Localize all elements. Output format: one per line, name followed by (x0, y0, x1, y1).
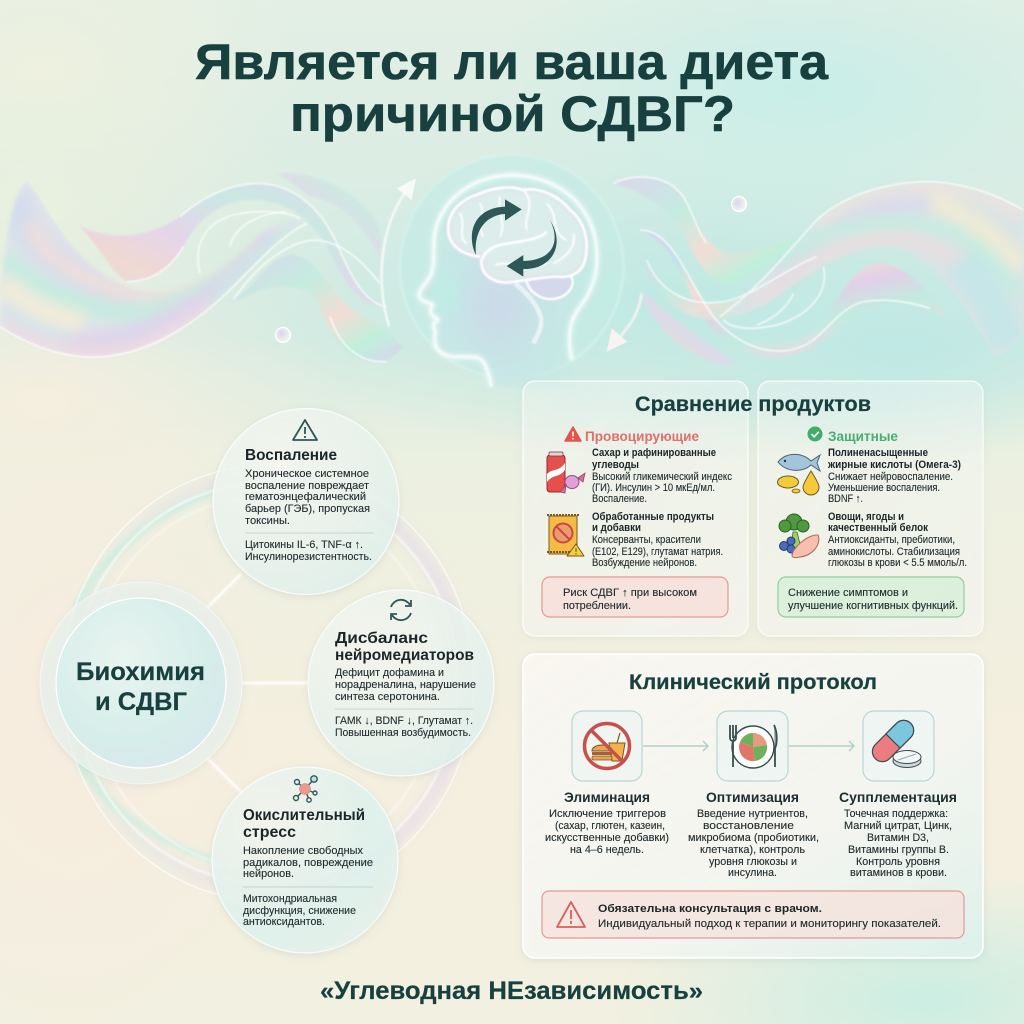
icon: molecule (294, 776, 317, 802)
arrow: left white (382, 178, 416, 327)
brain (448, 188, 587, 343)
description: радикалов, повреждение (243, 857, 373, 869)
step: оптимизация: микробиома (пробиотики, (688, 832, 819, 844)
callout text (598, 903, 941, 930)
step: элиминация: Элиминация (564, 789, 650, 805)
item: омега-3: Полиненасыщенные (828, 447, 928, 459)
item: овощи: аминокислоты. Стабилизация (828, 546, 960, 558)
heading: стресс (243, 824, 296, 841)
icon: warning (565, 427, 581, 441)
step: оптимизация: клетчатка), контроль (700, 844, 805, 856)
step: супплементация (839, 789, 957, 879)
step: оптимизация (688, 789, 819, 879)
markers: Инсулинорезистентность. (245, 551, 372, 563)
item: обработанные (592, 511, 723, 569)
node: дисбаланс нейромедиаторов (308, 590, 494, 776)
description: нейронов. (243, 868, 294, 880)
description: синтеза серотонина. (335, 691, 440, 703)
markers (245, 539, 372, 563)
step: супплементация: Супплементация (839, 789, 957, 805)
hub: Биохимия и СДВГ (40, 582, 242, 784)
head with brain (400, 155, 623, 387)
arrow: right white (607, 293, 642, 352)
callout: снижение (778, 577, 964, 617)
item: сахар: Воспаление. (592, 493, 647, 505)
node: воспаление (213, 408, 399, 594)
callout: снижение: Снижение симптомов и (788, 587, 908, 599)
item: сахар (592, 447, 732, 505)
icon: processed food bag (547, 515, 584, 556)
item: омега-3: Уменьшение воспаления. (828, 482, 940, 494)
callout: риск (542, 577, 728, 617)
icon box: optimisation (717, 711, 788, 781)
description: Накопление свободных (243, 845, 363, 857)
step: супплементация: Витамин D3, (867, 832, 929, 844)
item: омега-3 (827, 447, 961, 505)
icon: fish and omega (778, 454, 820, 495)
markers: Повышенная возбудимость. (335, 727, 471, 739)
title: причиной СДВГ? (290, 86, 735, 142)
item: омега-3: жирные кислоты (Омега-3) (827, 459, 961, 471)
callout text: Обязательна консультация с врачом. (598, 903, 822, 915)
iridescent waves right (613, 177, 1024, 365)
callout: риск: потреблении. (563, 600, 631, 612)
small bubble left (276, 328, 290, 342)
heading: Клинический протокол (629, 671, 877, 694)
item: обработанные: Возбуждение нейронов. (592, 557, 697, 569)
item: сахар: Сахар и рафинированные (592, 447, 716, 459)
markers (243, 893, 356, 928)
description: норадреналина, нарушение (335, 679, 476, 691)
step: элиминация: Исключение триггеров (549, 808, 666, 820)
icon: check (808, 426, 822, 442)
callout: снижение: улучшение когнитивных функций. (788, 600, 958, 612)
item: овощи: качественный белок (828, 522, 928, 534)
step: оптимизация: Оптимизация (706, 789, 799, 805)
heading: Воспаление (245, 447, 337, 464)
heading: Окислительный (243, 807, 365, 824)
step: оптимизация: Введение нутриентов, (697, 808, 808, 820)
markers: Цитокины IL-6, TNF-α ↑. (245, 539, 363, 551)
callout: консультация (542, 891, 964, 938)
heading (335, 630, 474, 664)
markers: Митохондриальная (243, 893, 337, 905)
description (335, 667, 476, 703)
step: элиминация (545, 789, 669, 856)
cycle rings (62, 465, 474, 901)
item: овощи: глюкозы в крови < 5.5 ммоль/л. (828, 557, 967, 569)
arrow (789, 741, 854, 751)
hub: Биохимия и СДВГ: Биохимия (76, 658, 205, 686)
title: Является ли ваша диета (195, 34, 829, 90)
small bubble right (732, 196, 746, 212)
panel: защитные (758, 381, 983, 636)
description: Хроническое системное (245, 468, 369, 480)
icon: vegetables and protein (779, 514, 819, 558)
iridescent waves left (0, 173, 403, 362)
step: оптимизация: уровня глюкозы и (709, 856, 797, 868)
item: обработанные: Обработанные продукты (592, 511, 714, 523)
title (195, 34, 829, 142)
heading: нейромедиаторов (335, 647, 474, 664)
markers (335, 715, 473, 739)
item: обработанные: Консерванты, красители (592, 534, 701, 546)
description (245, 468, 370, 527)
item: овощи: Антиоксиданты, пребиотики, (828, 534, 955, 546)
footer brand: «Углеводная НЕзависимость» (320, 977, 703, 1005)
item: обработанные: и добавки (592, 522, 641, 534)
step: супплементация: витаминов в крови. (850, 867, 947, 879)
step: элиминация: (сахар, глютен, казеин, (555, 820, 665, 832)
icon: warning outline (557, 902, 585, 927)
description (243, 845, 373, 880)
description: Дефицит дофамина и (335, 667, 444, 679)
subheading: Провоцирующие (585, 428, 699, 444)
hub: Биохимия и СДВГ: и СДВГ (95, 688, 187, 716)
markers: дисфункция, снижение (243, 905, 356, 917)
icon: sync (391, 600, 411, 620)
item: омега-3: BDNF ↑. (828, 493, 863, 505)
markers: антиоксидантов. (243, 916, 325, 928)
panel: провоцирующие (523, 381, 748, 636)
item: сахар: углеводы (592, 459, 639, 471)
arrow (643, 741, 708, 751)
step: оптимизация: восстановление (703, 820, 794, 832)
step: элиминация: искусственные добавки) (545, 832, 669, 844)
step: оптимизация: инсулина. (728, 867, 777, 879)
description: токсины. (245, 515, 290, 527)
step: элиминация: на 4–6 недель. (570, 844, 644, 856)
icon: warning triangle (293, 420, 317, 440)
item: омега-3: Снижает нейровоспаление. (828, 471, 953, 483)
icon box: supplementation (863, 711, 934, 781)
item: обработанные: (E102, E129), глутамат натрия. (592, 546, 723, 558)
connectors (207, 574, 308, 792)
panel: клинический протокол (320, 654, 983, 1005)
callout: риск: Риск СДВГ ↑ при высоком (563, 587, 697, 599)
description: барьер (ГЭБ), пропуская (245, 503, 370, 515)
step: супплементация: Витамины группы B. (848, 844, 949, 856)
node: окислительный стресс (212, 767, 398, 953)
description: воспаление повреждает (245, 480, 369, 492)
description: гематоэнцефалический (245, 491, 366, 503)
item: сахар: (ГИ). Инсулин > 10 мкЕд/мл. (592, 482, 715, 494)
circular dark arrows (472, 199, 557, 277)
item: овощи: Овощи, ягоды и (828, 511, 904, 523)
icon box: elimination (572, 711, 642, 781)
step: супплементация: Контроль уровня (856, 856, 940, 868)
icon: soda and candy (547, 452, 585, 493)
subheading: Защитные (828, 428, 898, 444)
heading (243, 807, 365, 841)
step: супплементация: Магний цитрат, Цинк, (844, 820, 952, 832)
item: сахар: Высокий гликемический индекс (592, 471, 732, 483)
callout text: Индивидуальный подход к терапии и мониторингу показателей. (598, 918, 941, 930)
heading: сравнение продуктов: Сравнение продуктов (635, 393, 871, 416)
markers: ГАМК ↓, BDNF ↓, Глутамат ↑. (335, 715, 473, 727)
step: супплементация: Точечная поддержка: (844, 808, 948, 820)
heading: Дисбаланс (335, 630, 428, 647)
item: овощи (828, 511, 967, 569)
